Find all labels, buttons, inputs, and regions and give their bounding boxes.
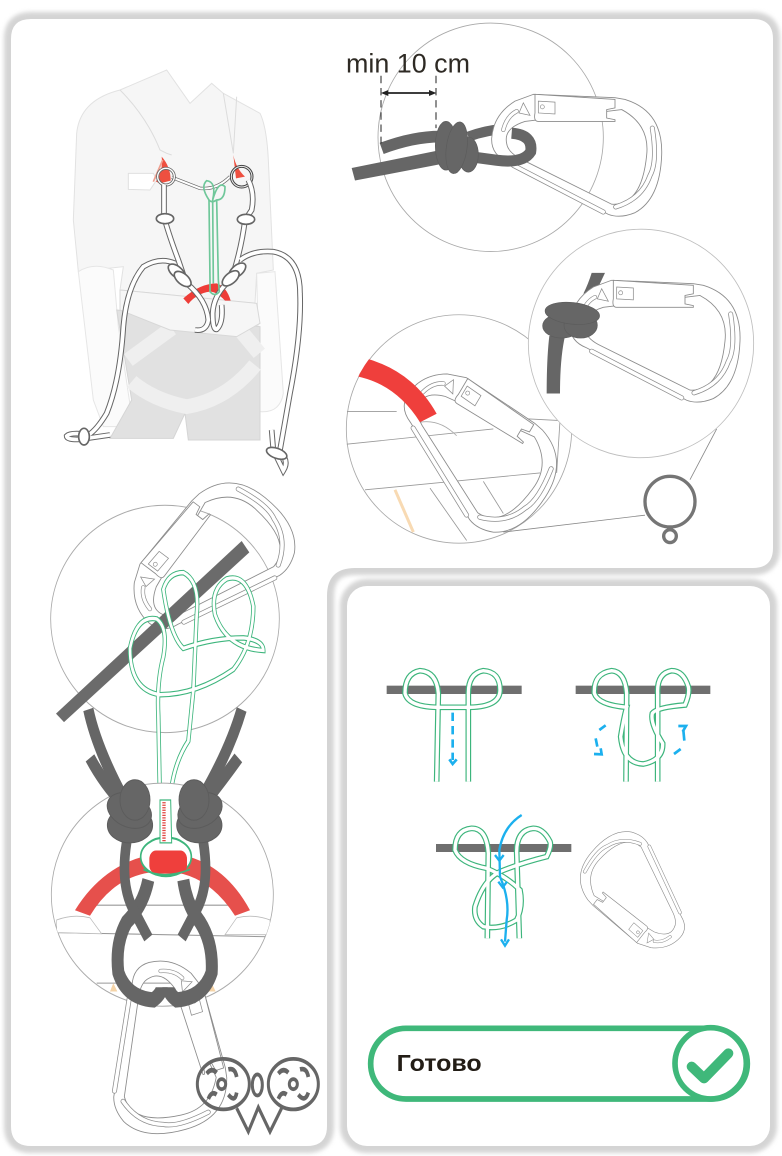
top detail circle with sling on bar [51, 461, 313, 804]
green loop on red ring [141, 800, 191, 876]
figure: person wearing harness with rope [67, 70, 300, 471]
figure: rope tied to central ring with sling [50, 482, 296, 1134]
icon: harness attachment diagram [197, 1059, 318, 1132]
step 1: sling over bar with dashed arrow [387, 671, 522, 782]
icon: ring attachment point [503, 429, 717, 543]
status pill: done [371, 1028, 747, 1099]
detail circle: knot on carabiner [528, 229, 754, 458]
gray rope strands [88, 709, 242, 1000]
gray rope knots [104, 780, 225, 843]
carabiner [565, 818, 715, 962]
label: done: Готово [397, 1050, 482, 1076]
green sling [204, 181, 225, 294]
figure: knot detail views and carabiners [346, 23, 754, 549]
figure: sling tying steps [387, 671, 715, 962]
rope knots [79, 214, 288, 462]
dimension arrow [381, 76, 436, 143]
icon: check mark [692, 1053, 728, 1078]
panel: steps frame [347, 586, 770, 1146]
label: min 10 cm: min 10 cm [346, 48, 470, 78]
step 3: threading the loop [436, 815, 571, 946]
red straps and belay loop [153, 155, 245, 304]
step 2: twist with rotation arrows [576, 671, 710, 782]
bottom detail circle with red belay loop [51, 783, 273, 1148]
detail circle: knot with min 10 cm [352, 23, 662, 252]
detail circle: carabiner on belt [346, 315, 576, 549]
